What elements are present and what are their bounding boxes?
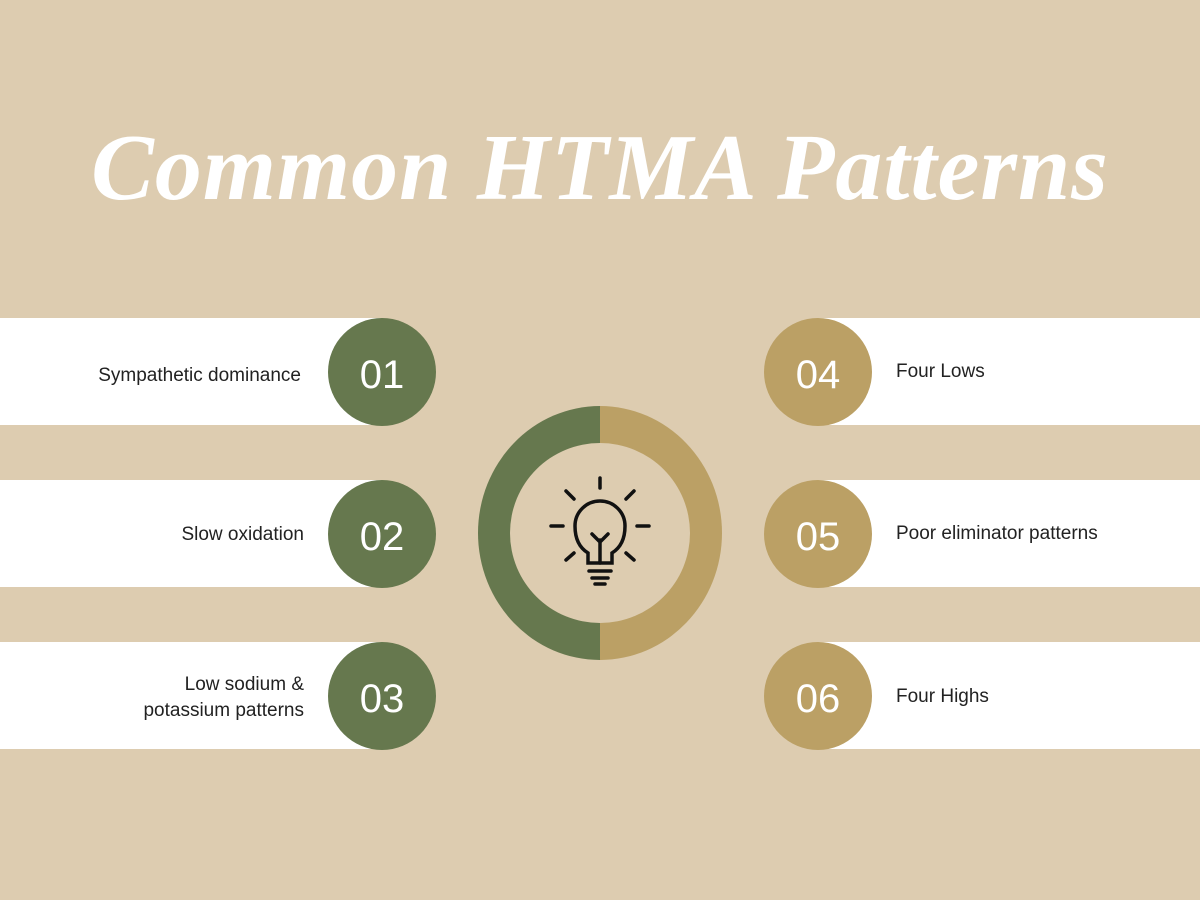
item 05 <box>764 480 1200 588</box>
item 02: Slow oxidation <box>181 524 304 545</box>
item 05: Poor eliminator patterns <box>896 523 1098 544</box>
center ring with lightbulb <box>478 406 722 660</box>
icon: lightbulb <box>551 478 649 584</box>
item 05: 05 <box>796 514 840 558</box>
item 03 <box>0 642 436 750</box>
item 01: Sympathetic dominance <box>98 365 301 386</box>
item 01 <box>0 318 436 426</box>
item 02: 02 <box>360 514 404 558</box>
title: Common HTMA Patterns <box>91 116 1109 220</box>
item 01: 01 <box>360 352 404 396</box>
item 04: Four Lows <box>896 361 985 382</box>
item 04 <box>764 318 1200 426</box>
item 06: 06 <box>796 676 840 720</box>
item 06: Four Highs <box>896 686 989 707</box>
item 06 <box>764 642 1200 750</box>
item 03: Low sodium & <box>185 674 304 695</box>
item 03: potassium patterns <box>143 700 304 721</box>
item 02 <box>0 480 436 588</box>
item 03: 03 <box>360 676 404 720</box>
item 04: 04 <box>796 352 840 396</box>
